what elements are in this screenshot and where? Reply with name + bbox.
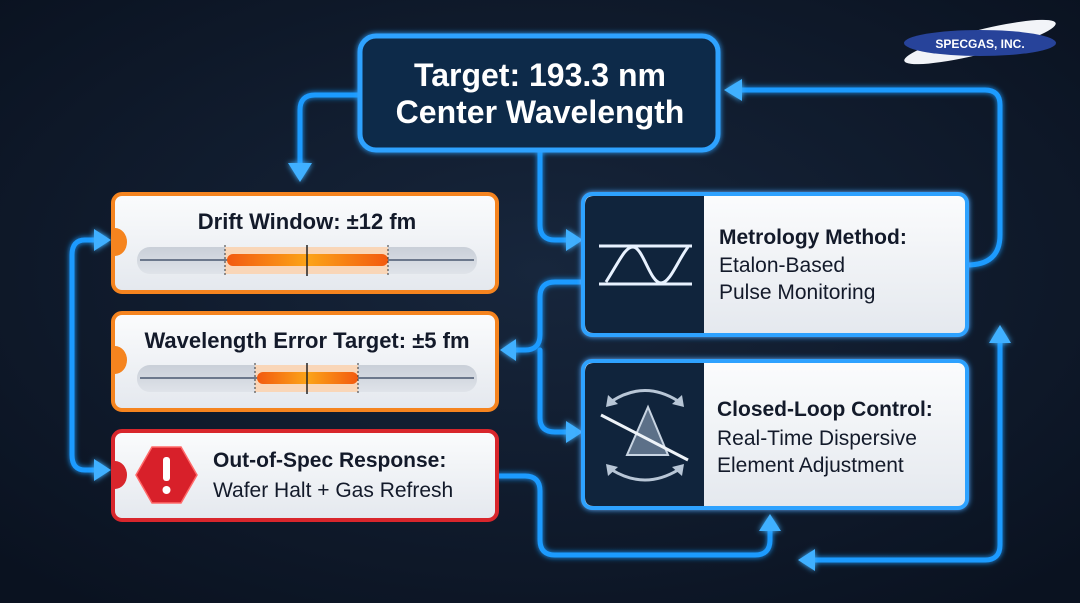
title box: Target: 193.3 nm: [414, 57, 666, 93]
panel: drift window: [113, 194, 497, 292]
panel: closed-loop control: Closed-Loop Control:: [717, 398, 933, 421]
panel: out-of-spec response: [113, 431, 497, 520]
panel: metrology method: Etalon-Based: [719, 254, 845, 277]
arrow heads: [94, 79, 1011, 571]
panel: out-of-spec response: Out-of-Spec Response:: [213, 449, 446, 472]
panel: metrology method: Pulse Monitoring: [719, 281, 875, 304]
icon: etalon wave: [599, 246, 692, 284]
panel: metrology method: Metrology Method:: [719, 226, 907, 249]
panel: closed-loop control: Real-Time Dispersive: [717, 427, 917, 450]
panel: drift window: Drift Window: ±12 fm: [198, 209, 416, 234]
logo: SPECGAS: SPECGAS, INC.: [935, 37, 1025, 51]
panel: out-of-spec response: Wafer Halt + Gas Refresh: [213, 479, 453, 502]
arrows: connectors: [72, 90, 1000, 560]
logo: SPECGAS: [901, 11, 1059, 73]
icon: warning hexagon: [136, 447, 197, 503]
panel: metrology method: [583, 194, 967, 335]
title box: [360, 36, 718, 150]
title box: Center Wavelength: [396, 94, 684, 130]
panel: closed-loop control: Element Adjustment: [717, 454, 904, 477]
panel: closed-loop control: [583, 361, 967, 508]
icon: prism with rotation arrows: [601, 390, 688, 480]
panel: wavelength error target: Wavelength Error Target: ±5 fm: [144, 328, 470, 353]
panel: wavelength error target: [113, 313, 497, 410]
